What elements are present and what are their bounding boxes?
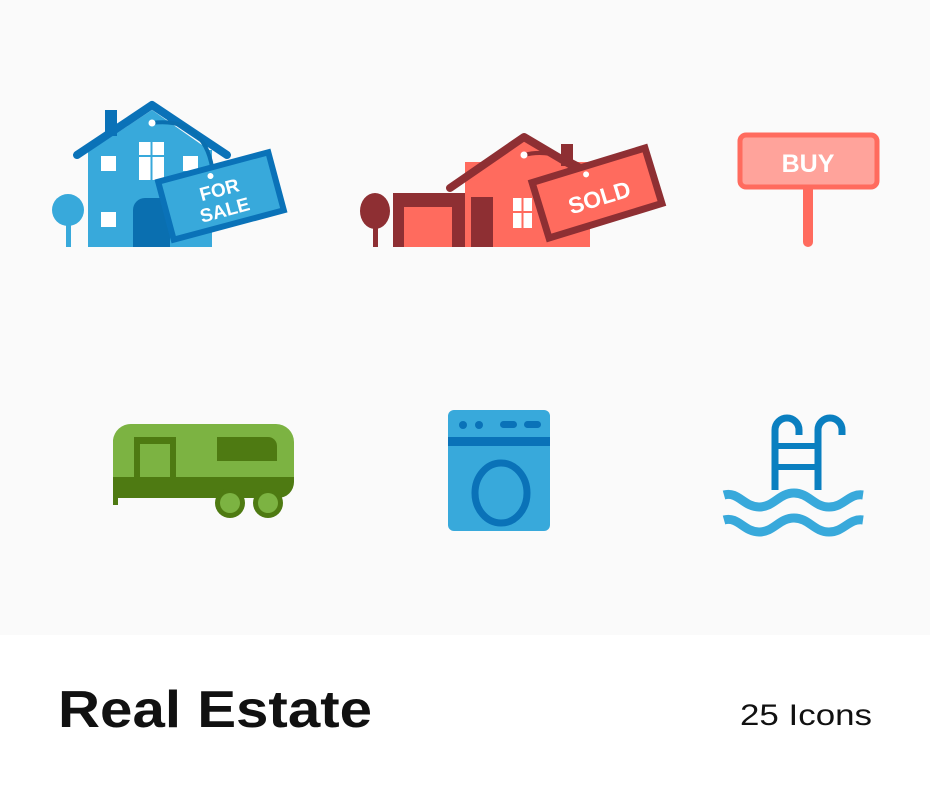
icon: sold house: SOLD <box>565 176 634 219</box>
icon: for sale house: SALE <box>198 194 252 228</box>
icon count: 25 Icons <box>740 699 872 732</box>
icon: trailer <box>113 424 294 518</box>
icon: buy sign <box>740 135 877 247</box>
icon: pool <box>724 418 863 532</box>
title: Real Estate <box>58 681 372 739</box>
icon: for sale house: FOR <box>197 175 242 206</box>
icon: buy sign: BUY <box>782 150 835 178</box>
icon: washing machine <box>448 410 550 531</box>
icon: for sale house <box>52 105 284 247</box>
icon: sold house <box>360 137 662 247</box>
